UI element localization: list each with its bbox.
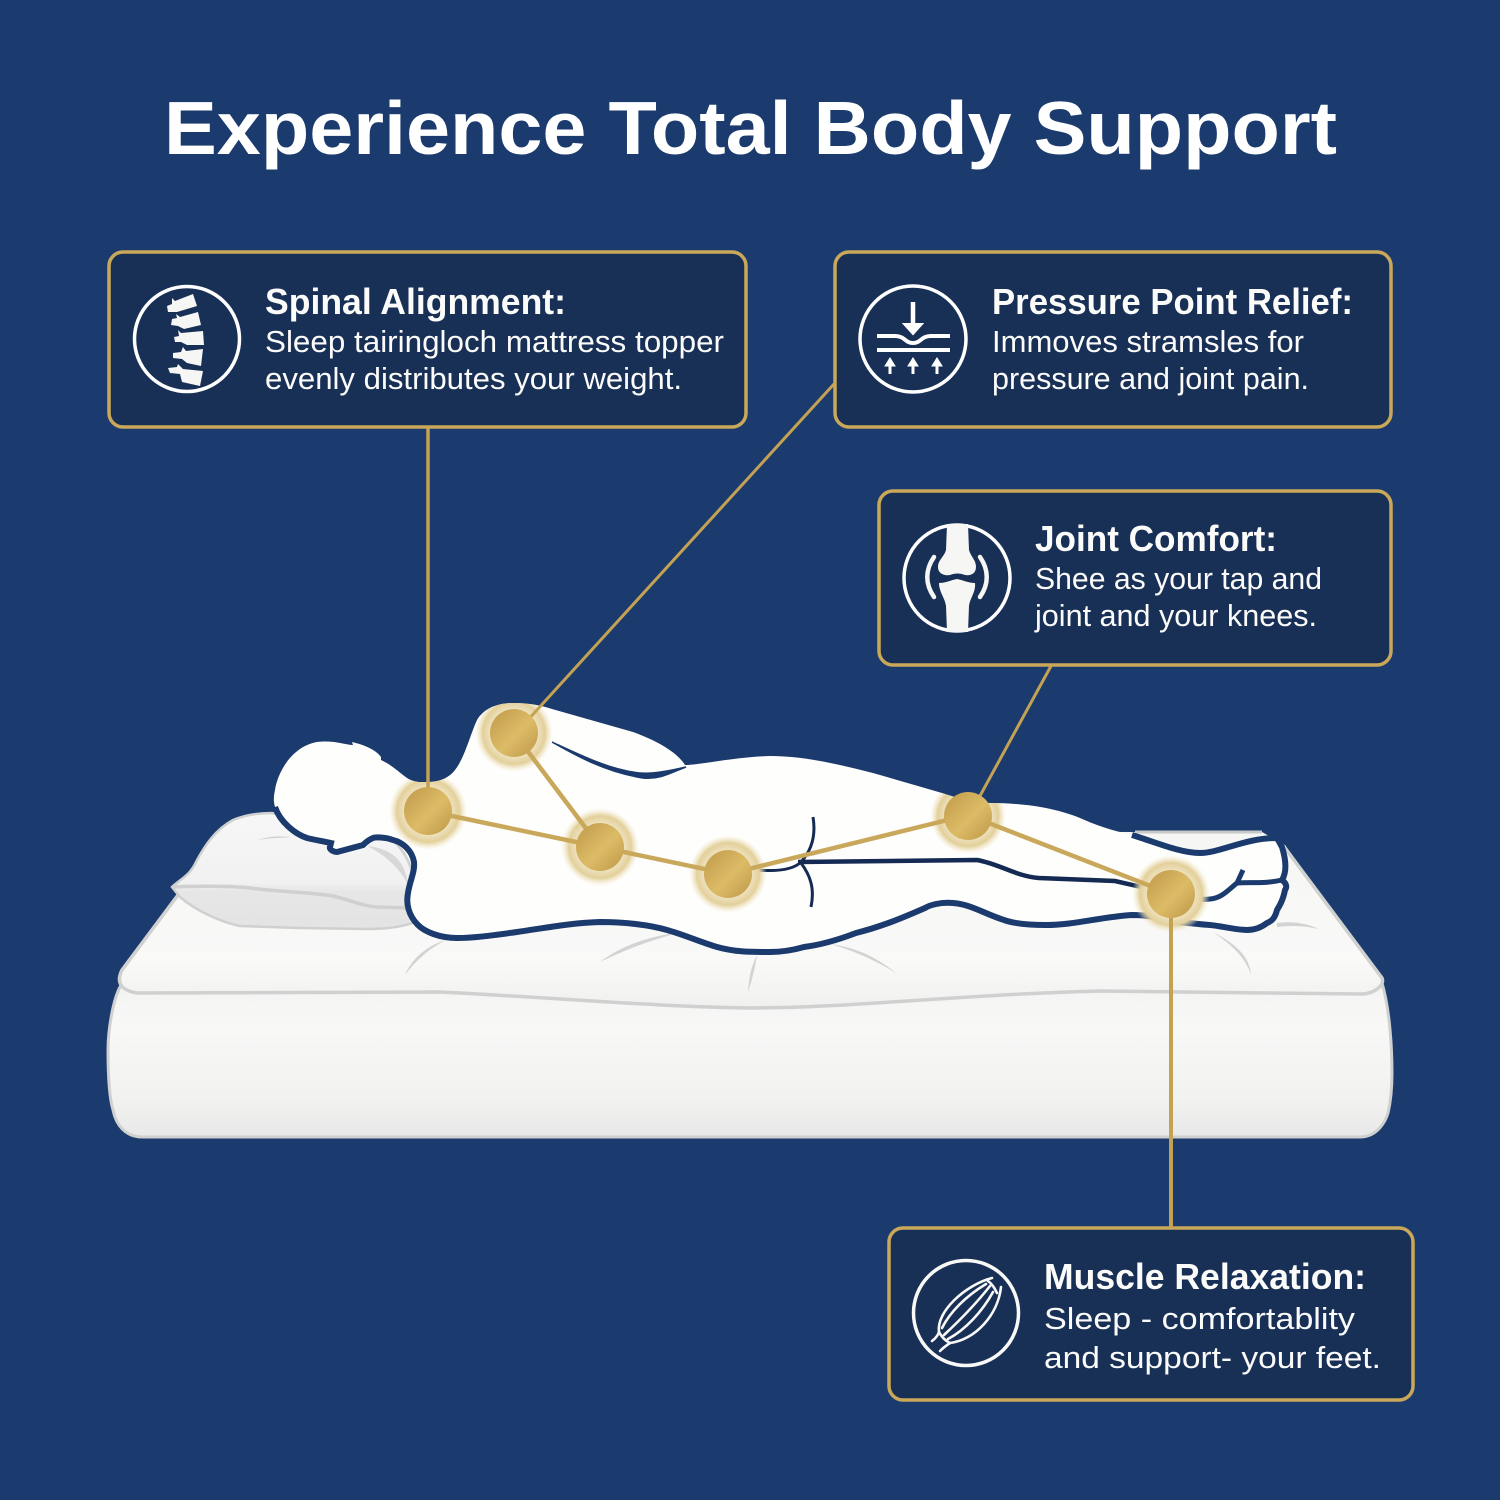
arm gap line — [552, 742, 686, 778]
body outline — [275, 807, 1286, 952]
leader: muscle relaxation — [1169, 900, 1173, 1228]
heading: Muscle Relaxation: — [1044, 1256, 1366, 1297]
mattress top surface — [119, 830, 1383, 1008]
description: Sleep - comfortablity — [1044, 1301, 1356, 1336]
description — [1034, 561, 1322, 633]
mattress side — [108, 970, 1392, 1137]
panel: pressure point relief — [835, 252, 1391, 427]
leader: spinal alignment — [426, 428, 430, 800]
description — [265, 324, 724, 396]
description: Sleep tairingloch mattress topper — [265, 324, 724, 359]
mattress back edge — [1135, 830, 1262, 834]
leg divider line — [798, 860, 1150, 889]
title: Experience Total Body Support — [164, 86, 1337, 170]
leader: joint comfort — [975, 666, 1051, 805]
pillow — [172, 813, 415, 929]
description: and support- your feet. — [1044, 1340, 1381, 1375]
pillow seam — [172, 886, 409, 908]
leader: pressure point relief — [526, 384, 834, 722]
body network lines — [428, 733, 1171, 894]
hip crease — [757, 817, 814, 907]
foot lines — [1190, 870, 1282, 899]
pillow crease — [257, 836, 292, 840]
icon: spine — [134, 286, 240, 392]
heading: Joint Comfort: — [1035, 518, 1277, 559]
body silhouette — [274, 703, 1286, 952]
heading: Spinal Alignment: — [265, 281, 566, 322]
icon: knee joint — [904, 524, 1010, 632]
description: Immoves stramsles for — [992, 324, 1304, 359]
description — [992, 324, 1309, 396]
description: pressure and joint pain. — [992, 361, 1309, 396]
node markers — [404, 709, 1195, 918]
panel: joint comfort — [879, 491, 1391, 665]
connector lines — [428, 384, 1171, 1228]
icon: pressure arrows — [860, 286, 966, 392]
description: Shee as your tap and — [1035, 561, 1322, 596]
mattress edges and seam — [119, 848, 1383, 1008]
description: joint and your knees. — [1034, 598, 1317, 633]
description — [1044, 1301, 1381, 1375]
icon: muscle — [914, 1260, 1018, 1366]
panel: muscle relaxation — [889, 1228, 1413, 1400]
panel: spinal alignment — [109, 252, 746, 427]
mattress creases — [405, 922, 1319, 992]
node halos — [389, 694, 1210, 933]
heading: Pressure Point Relief: — [992, 281, 1353, 322]
mattress — [108, 830, 1392, 1137]
description: evenly distributes your weight. — [265, 361, 682, 396]
pillow dent — [367, 846, 408, 885]
